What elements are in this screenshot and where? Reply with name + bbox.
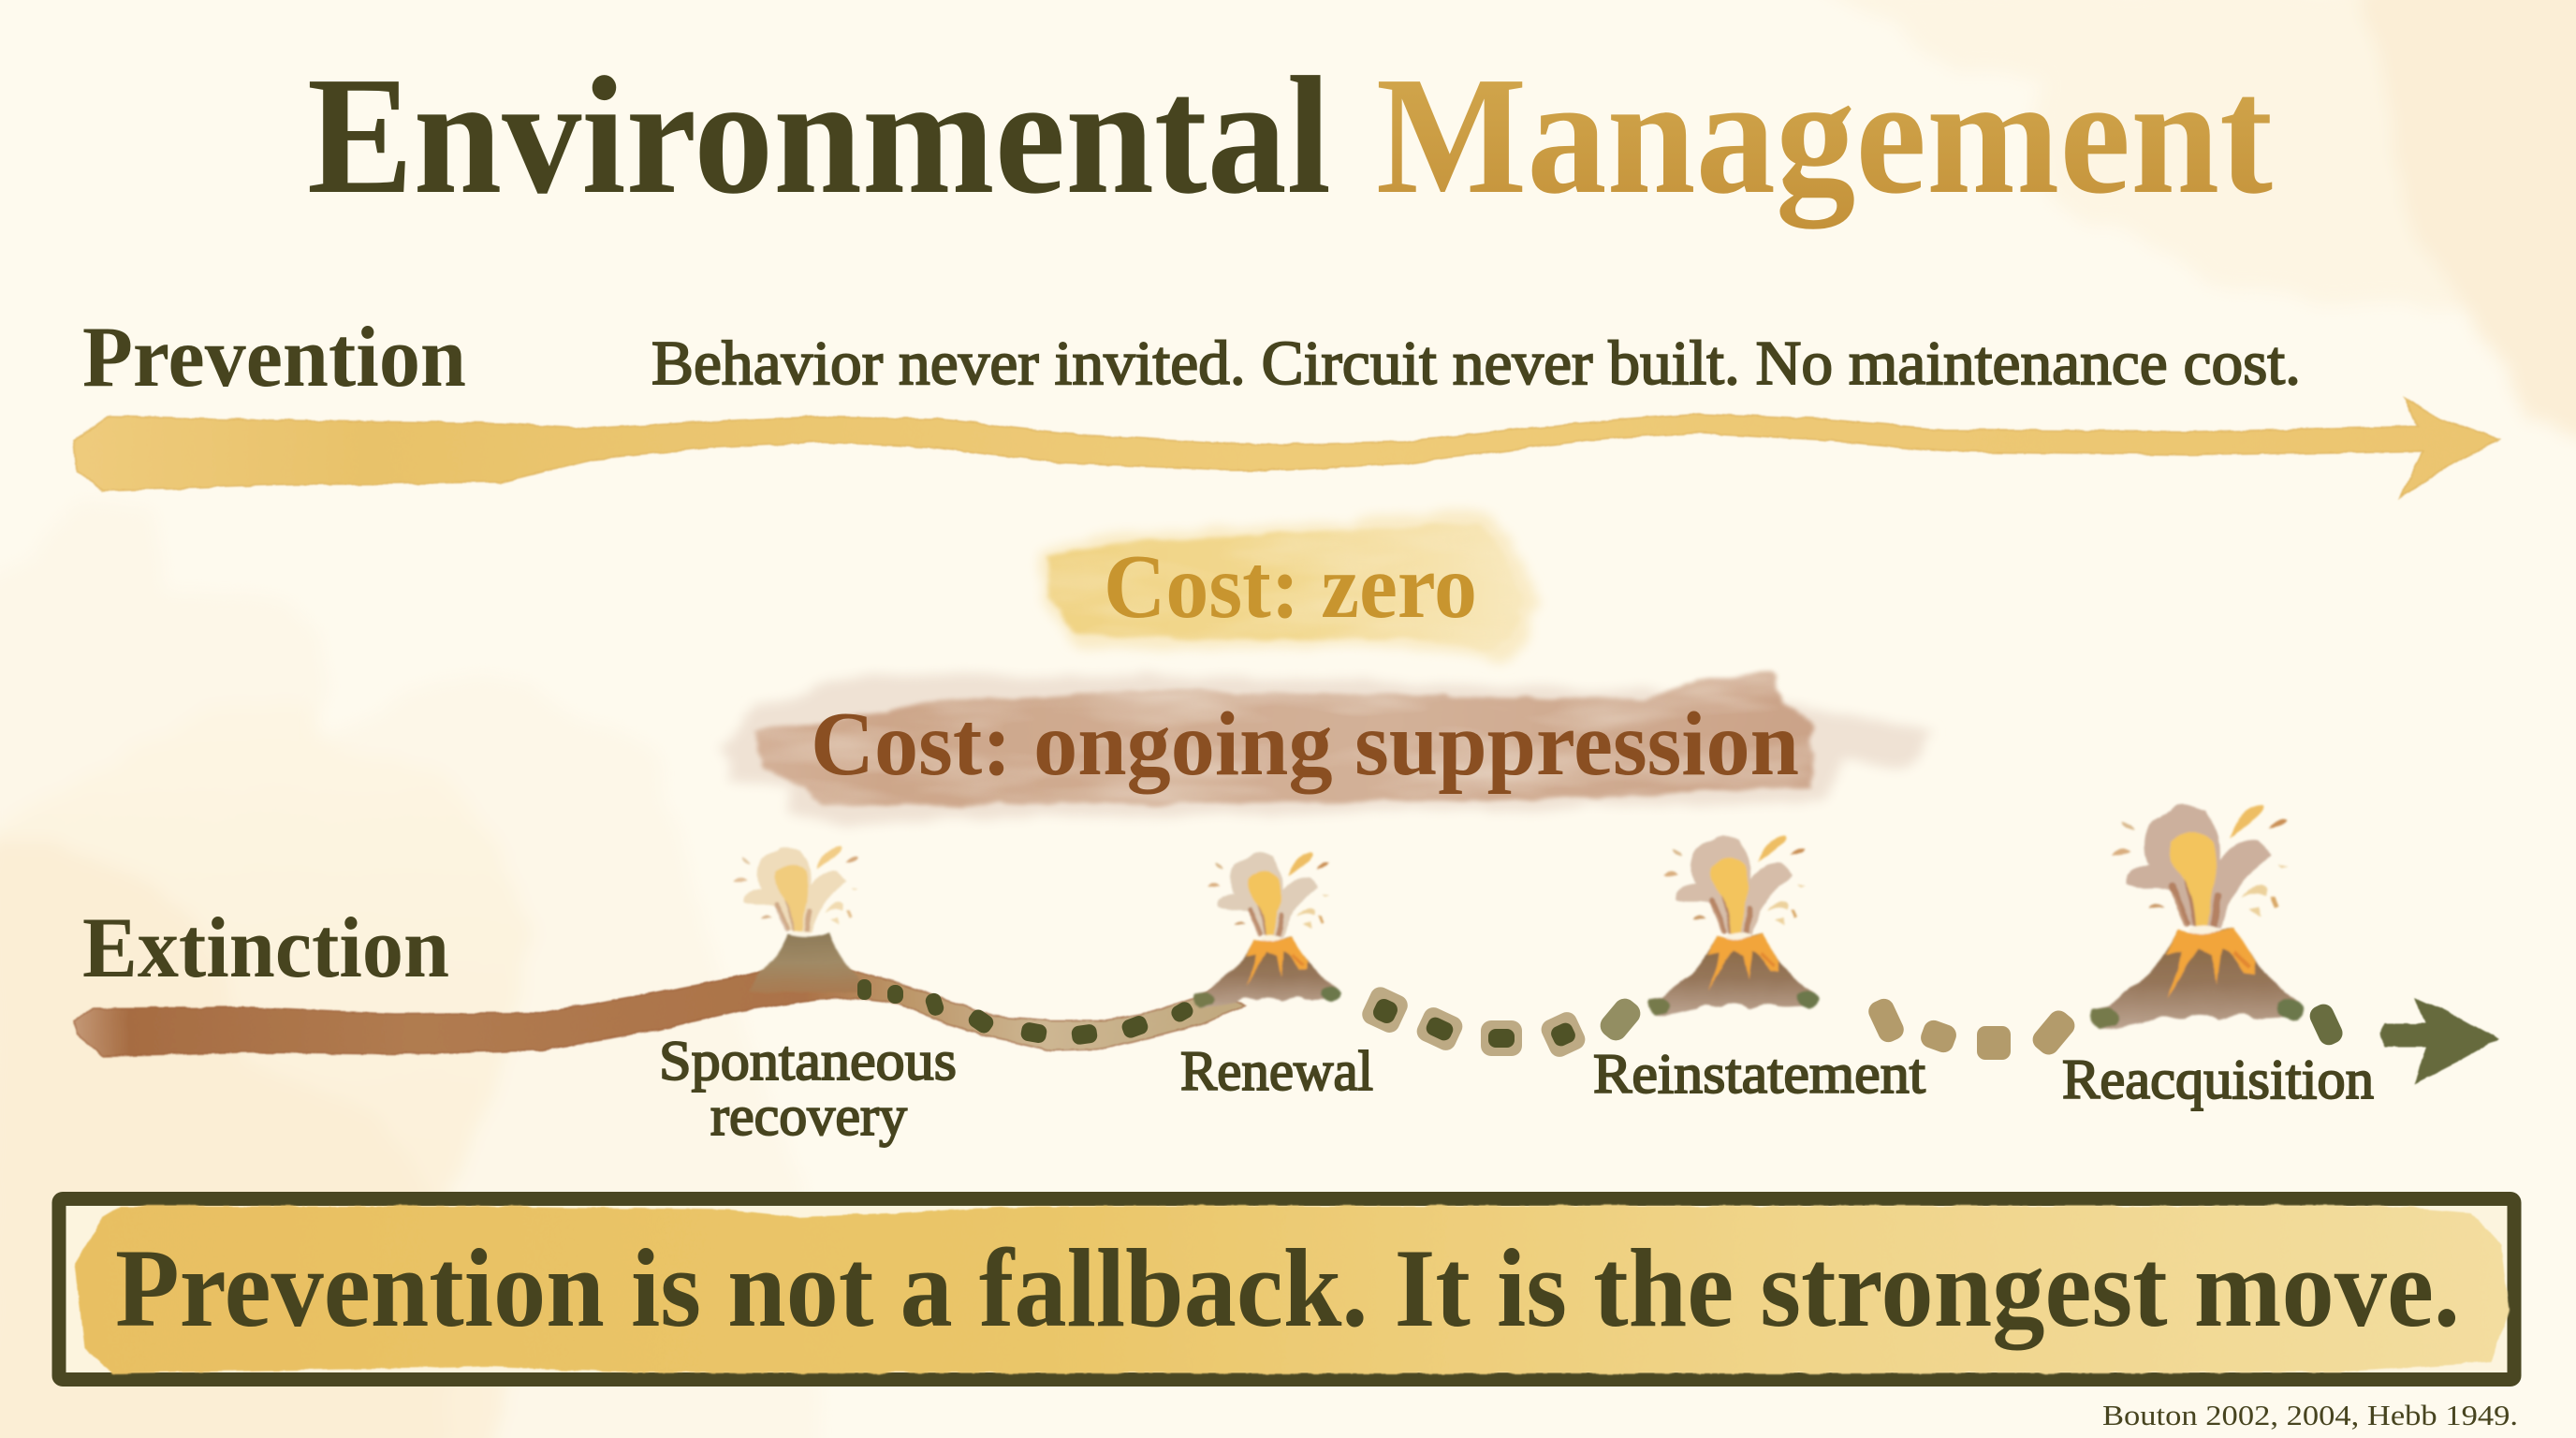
banner statement: Prevention is not a fallback. It is the strongest move. (115, 1225, 2460, 1351)
badge: cost zero (1041, 514, 1537, 663)
faint brush halo (723, 674, 1937, 826)
title: Environmental (307, 42, 1331, 228)
arrowhead: extinction (2378, 997, 2499, 1084)
path: brown stream (75, 964, 1245, 1056)
dots: stream breaking up (857, 979, 1195, 1046)
badge: cost ongoing suppression (723, 670, 1937, 826)
prevention description: Behavior never invited. Circuit never built. No maintenance cost. (651, 329, 2301, 398)
label: reacquisition: Reacquisition (2062, 1049, 2374, 1110)
background wash: top right (1797, 0, 2576, 449)
volcano: spontaneous recovery (734, 845, 866, 992)
heading: extinction: Extinction (82, 900, 449, 995)
arrow: prevention path (74, 398, 2499, 497)
callout banner (59, 1198, 2514, 1380)
dots: bordered fading segments (1359, 984, 2346, 1060)
background wash: lower left (0, 506, 824, 1438)
brush behind cost zero (1048, 524, 1524, 650)
label: renewal: Renewal (1180, 1040, 1373, 1102)
pale halo behind cost zero (1041, 514, 1537, 663)
label: spontaneous recovery: recovery (710, 1085, 907, 1147)
title: Management (1376, 42, 2273, 229)
label: cost ongoing suppression: Cost: ongoing suppression (811, 694, 1799, 794)
volcano: reinstatement (1647, 835, 1819, 1016)
label: spontaneous recovery (659, 1030, 957, 1147)
brush core (754, 670, 1811, 807)
banner frame (59, 1198, 2514, 1380)
label: spontaneous recovery: Spontaneous (659, 1030, 957, 1092)
volcano: renewal (1193, 852, 1341, 1007)
title (307, 42, 2273, 229)
volcano: reacquisition (2090, 804, 2305, 1030)
heading: prevention: Prevention (82, 309, 466, 404)
citation: Bouton 2002, 2004, Hebb 1949. (2102, 1399, 2518, 1431)
label: cost zero: Cost: zero (1104, 536, 1477, 637)
label: reinstatement: Reinstatement (1593, 1043, 1925, 1105)
arrow: extinction path (75, 804, 2499, 1084)
banner brush (75, 1206, 2509, 1373)
